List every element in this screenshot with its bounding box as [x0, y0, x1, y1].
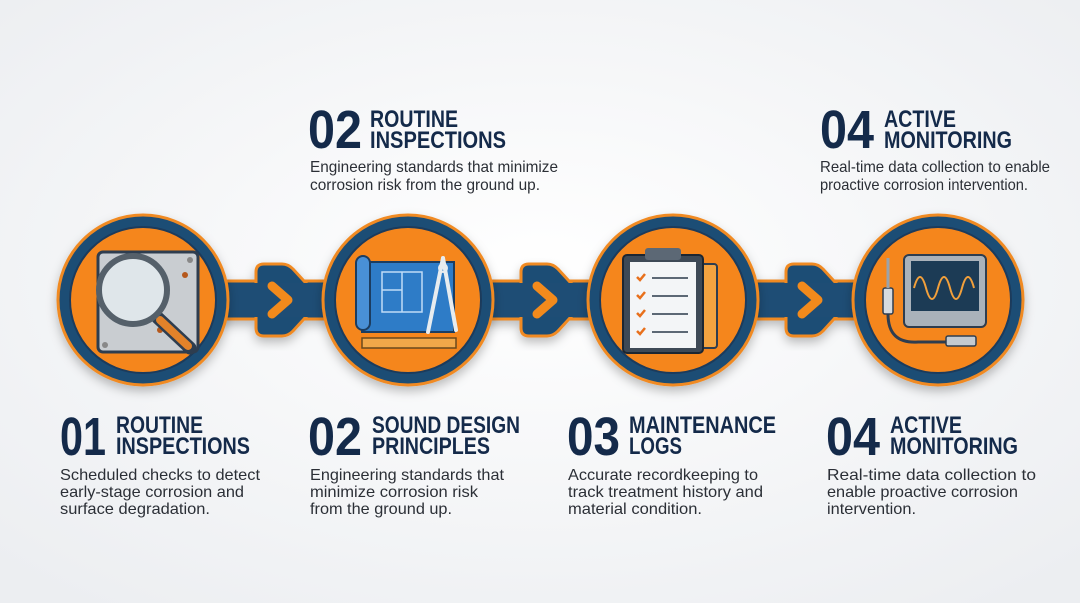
step 04 text: intervention.: [827, 501, 916, 518]
step 04 text: ACTIVE: [890, 412, 962, 439]
step 04 text: [826, 407, 1036, 518]
step 02 text: [308, 407, 520, 518]
step 04 text: Real-time data collection to: [827, 467, 1036, 484]
step 03 text: Accurate recordkeeping to: [568, 467, 758, 484]
step 02 text: PRINCIPLES: [372, 433, 490, 460]
step 03 text: material condition.: [568, 501, 702, 518]
top text: 04 active monitoring: MONITORING: [884, 127, 1012, 154]
circle 3: clipboard: [588, 215, 758, 385]
step 03 text: LOGS: [629, 433, 682, 460]
step 03 text: [567, 407, 776, 518]
step 01 text: ROUTINE: [116, 412, 203, 439]
top text: 02 routine inspections: [308, 100, 558, 194]
circle 4: monitor: [853, 215, 1023, 385]
top text: 02 routine inspections: 02: [308, 100, 362, 160]
top text: 04 active monitoring: [820, 100, 1050, 194]
circle 1: magnifier: [58, 215, 228, 385]
step 03 text: 03: [567, 407, 620, 467]
step 01 text: Scheduled checks to detect: [60, 467, 261, 484]
circle 2: blueprint: [323, 215, 493, 385]
step 02 text: from the ground up.: [310, 501, 452, 518]
step 04 text: enable proactive corrosion: [827, 484, 1018, 501]
step 02 text: Engineering standards that: [310, 467, 505, 484]
top text: 02 routine inspections: corrosion risk from the ground up.: [310, 177, 540, 194]
step 01 text: early-stage corrosion and: [60, 484, 244, 501]
top text: 04 active monitoring: proactive corrosion intervention.: [820, 177, 1028, 194]
top text: 02 routine inspections: Engineering standards that minimize: [310, 159, 558, 176]
top text: 02 routine inspections: ROUTINE: [370, 106, 458, 133]
arrow 3: [802, 286, 818, 314]
arrow 1: [272, 286, 288, 314]
step 02 text: 02: [308, 407, 362, 467]
top text: 04 active monitoring: 04: [820, 100, 874, 160]
step 04 text: MONITORING: [890, 433, 1018, 460]
step 03 text: track treatment history and: [568, 484, 763, 501]
step 01 text: [60, 407, 261, 518]
top text: 02 routine inspections: INSPECTIONS: [370, 127, 506, 154]
step 01 text: surface degradation.: [60, 501, 210, 518]
step 04 text: 04: [826, 407, 880, 467]
step 01 text: 01: [60, 407, 106, 467]
top text: 04 active monitoring: Real-time data collection to enable: [820, 159, 1050, 176]
step 02 text: SOUND DESIGN: [372, 412, 520, 439]
step 03 text: MAINTENANCE: [629, 412, 776, 439]
step 02 text: minimize corrosion risk: [310, 484, 479, 501]
step 01 text: INSPECTIONS: [116, 433, 250, 460]
connector band: [140, 264, 940, 336]
arrow 2: [537, 286, 553, 314]
top text: 04 active monitoring: ACTIVE: [884, 106, 956, 133]
